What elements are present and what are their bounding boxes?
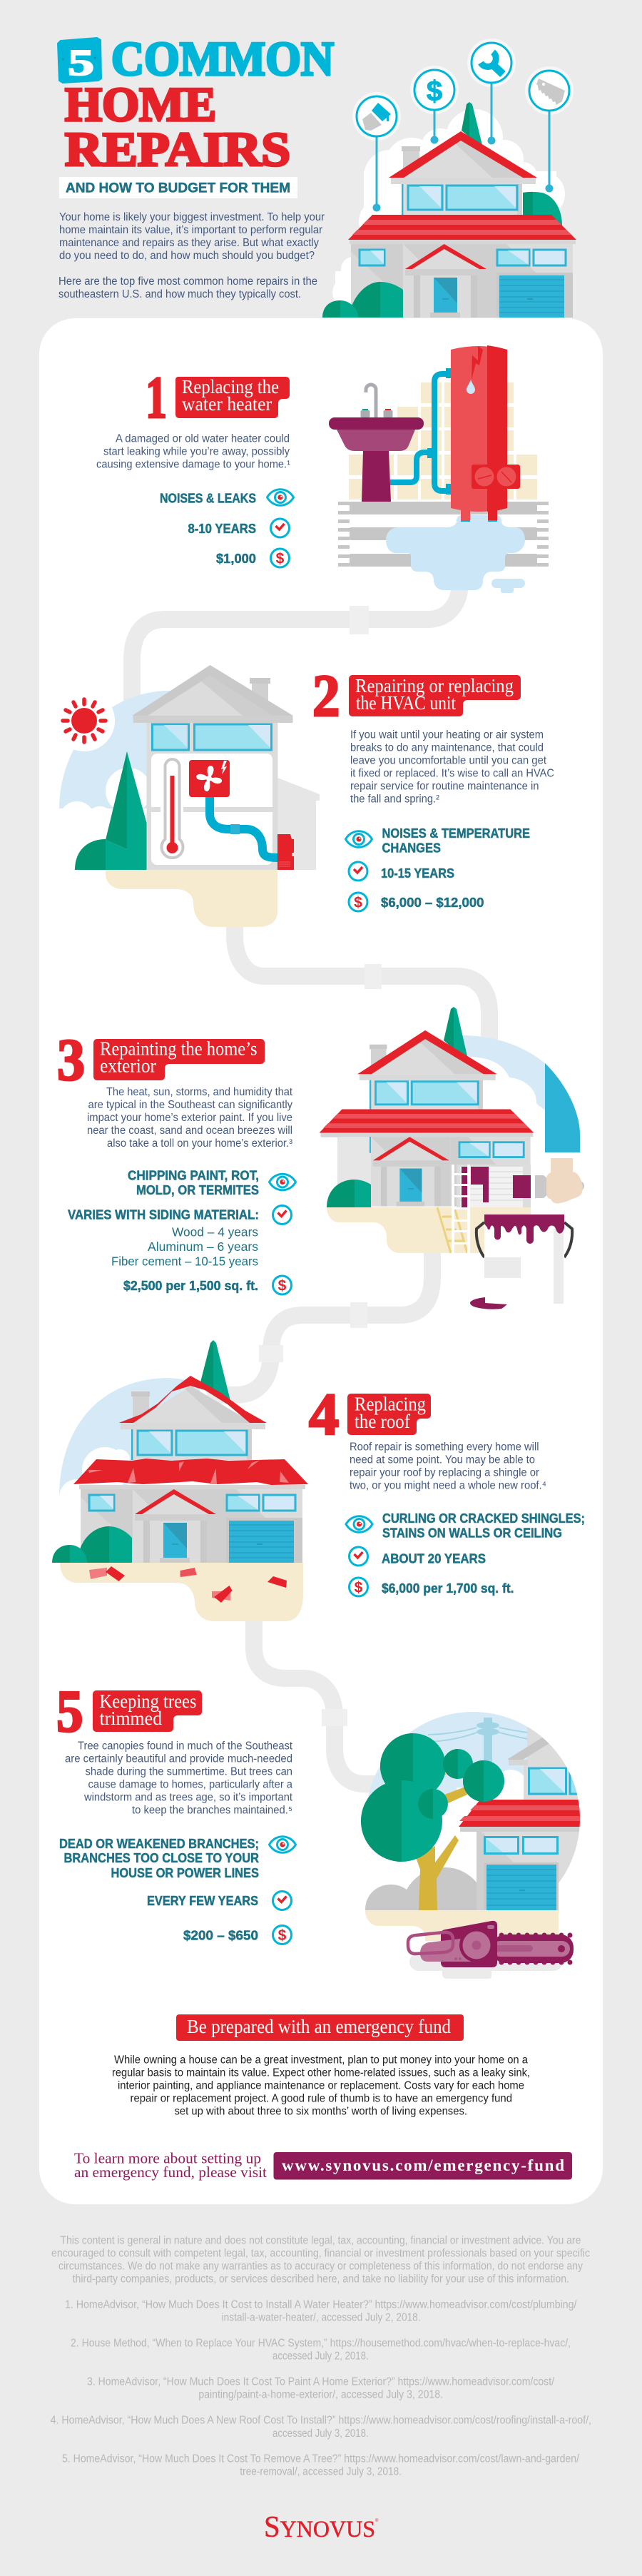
intro text: maintenance and repairs as they arise. But what exactly <box>59 237 319 249</box>
footnotes: 3. HomeAdvisor, “How Much Does It Cost To Paint A Home Exterior?” https://www.homeadvisor.com/cost/ <box>87 2376 555 2388</box>
heading tag: trimmed <box>100 1708 162 1729</box>
item: signs: CHANGES <box>382 841 441 855</box>
item: lifespan: EVERY FEW YEARS <box>147 1893 258 1908</box>
body text: shade during the summertime. But trees can <box>86 1766 292 1778</box>
item: cost: $6,000 per 1,700 sq. ft. <box>382 1581 514 1596</box>
cloud <box>457 1770 527 1802</box>
body text: start leaking while you’re away, possibly <box>103 445 290 458</box>
chainsaw shadow <box>409 1954 562 1979</box>
tree <box>200 1340 231 1404</box>
logo: Synovus: ® <box>375 2518 379 2523</box>
body text: also take a toll on your home’s exterior.³ <box>107 1137 292 1150</box>
house roof <box>132 665 293 723</box>
paintbrush in hand <box>513 1158 584 1204</box>
heading: COMMON: COMMON <box>111 31 334 86</box>
upper roof <box>389 131 537 178</box>
sky <box>59 1378 200 1499</box>
lower roof <box>348 215 576 240</box>
footnotes: painting/paint-a-home-exterior/, accessed July 3, 2018. <box>198 2389 443 2401</box>
intro text: home maintain its value, it’s important to perform regular <box>59 224 322 236</box>
footnotes: accessed July 2, 2018. <box>272 2351 369 2363</box>
logo: Synovus: SYNOVUS <box>264 2511 375 2544</box>
item: lifespan: Fiber cement – 10-15 years <box>111 1254 258 1269</box>
fan unit <box>189 760 230 797</box>
item: lifespan: ABOUT 20 YEARS <box>382 1551 486 1566</box>
item: cost: $2,500 per 1,500 sq. ft. <box>123 1278 258 1293</box>
number 1: 1 <box>146 365 167 431</box>
section 3: repainting the exterior <box>57 1007 584 1309</box>
chimney <box>250 678 270 705</box>
house body <box>79 1386 305 1563</box>
body text: need at some point. You may be able to <box>350 1454 535 1466</box>
intro text <box>58 211 325 300</box>
number 5: 5 <box>56 1678 83 1745</box>
item: lifespan: 10-15 YEARS <box>381 866 454 881</box>
item: signs: CURLING OR CRACKED SHINGLES; <box>382 1511 585 1526</box>
body text: leave you uncomfortable until you can get <box>350 755 547 767</box>
icon: number 5 tile: 5 <box>68 43 94 83</box>
item: cost: $ <box>278 1277 287 1294</box>
intro text: do you need to do, and how much should you budget? <box>59 250 315 262</box>
heading tag: Repairing or replacing <box>355 675 514 696</box>
ground <box>60 1563 303 1621</box>
tree behind house <box>462 102 482 145</box>
bush <box>327 1180 371 1207</box>
item: lifespan <box>349 862 454 881</box>
body text <box>350 729 554 806</box>
body text: near the coast, sand and ocean breezes will <box>87 1125 292 1137</box>
water heater legs <box>461 508 497 522</box>
item: signs <box>128 1167 295 1197</box>
fallen shingles <box>89 1566 287 1603</box>
heading tag: Replacing <box>355 1394 426 1415</box>
section 4: replacing the roof <box>52 1340 585 1621</box>
paint bucket <box>477 1215 572 1304</box>
item: lifespan <box>68 1206 291 1269</box>
tree <box>444 1007 467 1056</box>
disclaimer text: third-party companies, products, or services described here, and take no liability for your use of this information. <box>73 2273 569 2286</box>
pipe connecting sections 3 to 4 <box>207 1249 432 1395</box>
tree trunk and branches <box>416 1767 467 1910</box>
item: signs: MOLD, OR TERMITES <box>136 1182 259 1197</box>
intro text: southeastern U.S. and how much they typically cost. <box>58 288 301 300</box>
sky <box>368 1712 578 1798</box>
number 3: 3 <box>57 1027 85 1093</box>
body text: repair or replacement project. A good rule of thumb is to have an emergency fund <box>130 2092 512 2104</box>
item: lifespan <box>350 1547 486 1566</box>
item: cost <box>216 549 290 567</box>
item: signs <box>59 1836 295 1880</box>
item: lifespan: 8-10 YEARS <box>188 521 256 536</box>
house lower walls <box>350 240 576 318</box>
section 2: HVAC unit <box>54 663 554 927</box>
body text: to keep the branches maintained.⁵ <box>132 1805 292 1817</box>
water heater tank <box>451 345 520 512</box>
body text: A damaged or old water heater could <box>116 432 290 445</box>
house cropped by circle <box>459 1727 580 1910</box>
subtitle banner: AND HOW TO BUDGET FOR THEM <box>66 180 290 196</box>
heading tag <box>93 1690 202 1732</box>
item: cost <box>349 893 484 911</box>
power pole and wires <box>428 1718 528 1763</box>
item: cost: $1,000 <box>216 551 256 566</box>
heading tag: the HVAC unit <box>356 692 456 714</box>
body text: are typical in the Southeast can significantly <box>88 1099 292 1111</box>
disclaimer text: This content is general in nature and does not constitute legal, tax, accounting, financial or investment advice. You are <box>60 2235 581 2247</box>
call to action text: To learn more about setting up <box>74 2149 261 2166</box>
pin: saw <box>525 66 574 193</box>
body text: impact your home’s exterior paint. If you live <box>87 1112 292 1124</box>
body text: repair your roof by replacing a shingle or <box>350 1467 539 1479</box>
item: cost: $6,000 – $12,000 <box>381 895 484 910</box>
wall tiles <box>349 382 537 500</box>
HVAC pipe <box>210 797 277 858</box>
item: signs: DEAD OR WEAKENED BRANCHES; <box>59 1836 259 1851</box>
heading tag: Keeping trees <box>100 1690 197 1712</box>
call to action text: an emergency fund, please visit <box>74 2164 267 2181</box>
pipe connecting sections 2 to 3 <box>235 921 489 1042</box>
windows <box>153 724 271 750</box>
body text: If you wait until your heating or air system <box>350 729 544 741</box>
item: lifespan: VARIES WITH SIDING MATERIAL: <box>68 1207 259 1222</box>
sink <box>329 385 424 502</box>
body text <box>112 2054 530 2117</box>
tree and bush <box>75 751 147 870</box>
heading: REPAIRS: REPAIRS <box>65 122 290 176</box>
left wing faded <box>321 1134 371 1207</box>
title: 5 common home repairs <box>58 31 334 176</box>
pin: wrench <box>467 39 516 144</box>
illustration: house with HVAC <box>54 665 320 927</box>
item: lifespan: Wood – 4 years <box>172 1224 258 1239</box>
item: cost <box>183 1925 291 1944</box>
illustration: house being painted <box>320 1007 584 1309</box>
item: signs <box>346 1511 585 1540</box>
heading tag: exterior <box>100 1055 156 1077</box>
tree foliage <box>361 1733 504 1862</box>
ground <box>327 1207 531 1253</box>
heading tag <box>93 1038 265 1080</box>
ground <box>365 1910 559 1941</box>
item: signs: NOISES & TEMPERATURE <box>382 826 530 841</box>
panel: main white card <box>39 318 603 2204</box>
house upper <box>391 141 536 261</box>
house windows and garage <box>484 1837 559 1910</box>
heading tag: water heater <box>182 393 272 415</box>
floor boards <box>338 502 549 567</box>
disclaimer text: circumstances. We do not make any warranties as to accuracy or completeness of this information, do not endorse any <box>58 2261 583 2273</box>
item: cost: $ <box>354 895 362 911</box>
ladder <box>452 1165 470 1253</box>
item: lifespan <box>188 519 290 537</box>
body text <box>350 1441 546 1492</box>
bush: right <box>523 192 562 228</box>
sun <box>54 690 115 751</box>
paint strokes <box>462 1167 489 1207</box>
water puddle <box>386 515 525 593</box>
bushes <box>52 1526 132 1563</box>
house cutaway wall <box>147 723 278 870</box>
outdoor unit <box>277 834 294 870</box>
pin: paintbrush <box>352 92 401 211</box>
illustration: hero house with tool pins <box>322 39 576 318</box>
body text <box>87 1086 293 1150</box>
body text: The heat, sun, storms, and humidity that <box>106 1086 293 1098</box>
heading tag: Be prepared with an emergency fund <box>187 2016 451 2037</box>
ladder shadow <box>437 1207 467 1253</box>
ground <box>106 870 277 927</box>
footnotes: accessed July 3, 2018. <box>272 2428 369 2440</box>
neighbouring house <box>277 778 320 870</box>
damaged lower roof <box>73 1459 308 1485</box>
body text <box>65 1740 293 1817</box>
intro text: Your home is likely your biggest investment. To help your <box>59 211 325 223</box>
item: signs: NOISES & LEAKS <box>160 491 256 505</box>
footnotes: 1. HomeAdvisor, “How Much Does It Cost to Install A Water Heater?” https://www.homeadvisor.com/cost/plumbing/ <box>65 2299 577 2311</box>
body text: two, or you might need a whole new roof.⁴ <box>350 1480 546 1492</box>
grey bushes <box>365 1867 477 1910</box>
intro text: Here are the top five most common home repairs in the <box>58 275 317 288</box>
body text: While owning a house can be a great investment, plan to put money into your home on a <box>114 2054 528 2066</box>
heading tag: the roof <box>355 1411 410 1432</box>
clouds <box>59 1447 130 1515</box>
body text: it fixed or replaced. It’s wise to call an HVAC <box>350 768 554 780</box>
body text: repair service for routine maintenance in <box>350 781 539 793</box>
bushes: left <box>322 282 403 318</box>
item: cost: $ <box>355 1580 363 1596</box>
damaged upper roof <box>118 1376 267 1423</box>
body text: set up with about three to six months’ worth of living expenses. <box>174 2105 467 2117</box>
pipe connecting sections 4 to 5 <box>254 1616 392 1784</box>
body text: the fall and spring.² <box>350 793 439 806</box>
footnotes: 2. House Method, “When to Replace Your HVAC System,” https://housemethod.com/hvac/when-to-replace-hvac/, <box>71 2338 571 2350</box>
section: emergency fund <box>74 2014 572 2181</box>
heading tag <box>175 376 290 418</box>
section 5: keeping trees trimmed <box>56 1678 598 1979</box>
sky arc <box>462 1035 545 1110</box>
number 2: 2 <box>312 663 340 729</box>
cloud behind house <box>332 109 565 318</box>
body text: breaks to do any maintenance, that could <box>350 742 544 754</box>
body text: Tree canopies found in much of the Southeast <box>78 1740 293 1753</box>
call to action text <box>74 2149 267 2181</box>
disclaimer text: encouraged to consult with competent legal, tax, accounting, financial or investment professionals based on your specific <box>51 2248 590 2260</box>
body text: regular basis to maintain its value. Expect other home-related issues, such as a leaky sink, <box>112 2067 530 2079</box>
pin: dollar: $ <box>427 76 442 107</box>
disclaimer text <box>51 2235 590 2286</box>
heading tag <box>349 675 521 716</box>
body text: causing extensive damage to your home.¹ <box>96 458 290 471</box>
body text: cause damage to homes, particularly after a <box>88 1779 292 1791</box>
heading tag <box>347 1394 431 1435</box>
body text: windstorm and as trees age, so it’s important <box>83 1792 293 1804</box>
item: signs: CHIPPING PAINT, ROT, <box>128 1167 259 1183</box>
heading tag: Repainting the home’s <box>100 1038 257 1060</box>
item: signs: STAINS ON WALLS OR CEILING <box>382 1526 562 1540</box>
section 1: replacing the water heater <box>96 345 549 593</box>
footnotes <box>51 2299 591 2478</box>
body text <box>96 432 290 471</box>
body text: interior painting, and appliance maintenance or replacement. Costs vary for each home <box>118 2079 524 2091</box>
sky <box>59 691 207 808</box>
pipe connecting sections 1 to 2 <box>132 582 460 714</box>
illustration: water heater and sink <box>329 345 549 593</box>
clouds <box>59 768 151 837</box>
body text: Roof repair is something every home will <box>350 1441 539 1454</box>
chainsaw <box>408 1921 574 1967</box>
item: cost <box>350 1578 514 1596</box>
body text: are certainly beautiful and provide much-needed <box>65 1753 292 1765</box>
heading tag: Replacing the <box>182 376 279 397</box>
number 4: 4 <box>309 1381 339 1448</box>
item: signs: HOUSE OR POWER LINES <box>111 1865 259 1880</box>
item: lifespan: Aluminum – 6 years <box>148 1239 258 1254</box>
item: signs: BRANCHES TOO CLOSE TO YOUR <box>64 1850 259 1865</box>
item: cost: $ <box>278 1927 287 1944</box>
thermometer <box>162 759 183 858</box>
paint spill <box>470 1297 507 1309</box>
url button <box>274 2152 572 2179</box>
house <box>320 1030 534 1207</box>
heading: HOME: HOME <box>65 77 216 131</box>
icon: number 5 tile <box>58 38 101 83</box>
item: cost <box>123 1276 291 1294</box>
pipes <box>390 368 451 495</box>
footnotes: install-a-water-heater/, accessed July 2, 2018. <box>222 2312 421 2324</box>
sleeve <box>545 1063 580 1152</box>
illustration: tree near house and chainsaw <box>361 1712 580 1979</box>
url button: www.synovus.com/emergency-fund <box>282 2156 564 2174</box>
item: cost: $ <box>276 551 285 567</box>
pin: dollar <box>410 66 459 144</box>
illustration: damaged roof house <box>52 1340 308 1621</box>
item: cost: $200 – $650 <box>183 1928 258 1942</box>
unpainted garage door <box>457 1165 531 1207</box>
item: signs <box>345 826 530 855</box>
footnotes: 5. HomeAdvisor, “How Much Does It Cost To Remove A Tree?” https://www.homeadvisor.com/cost/lawn-and-garden/ <box>62 2453 580 2465</box>
footnotes: tree-removal/, accessed July 3, 2018. <box>240 2466 402 2478</box>
footnotes: 4. HomeAdvisor, “How Much Does A New Roof Cost To Install?” https://www.homeadvisor.com/cost/roofing/install-a-roof/, <box>51 2415 591 2427</box>
